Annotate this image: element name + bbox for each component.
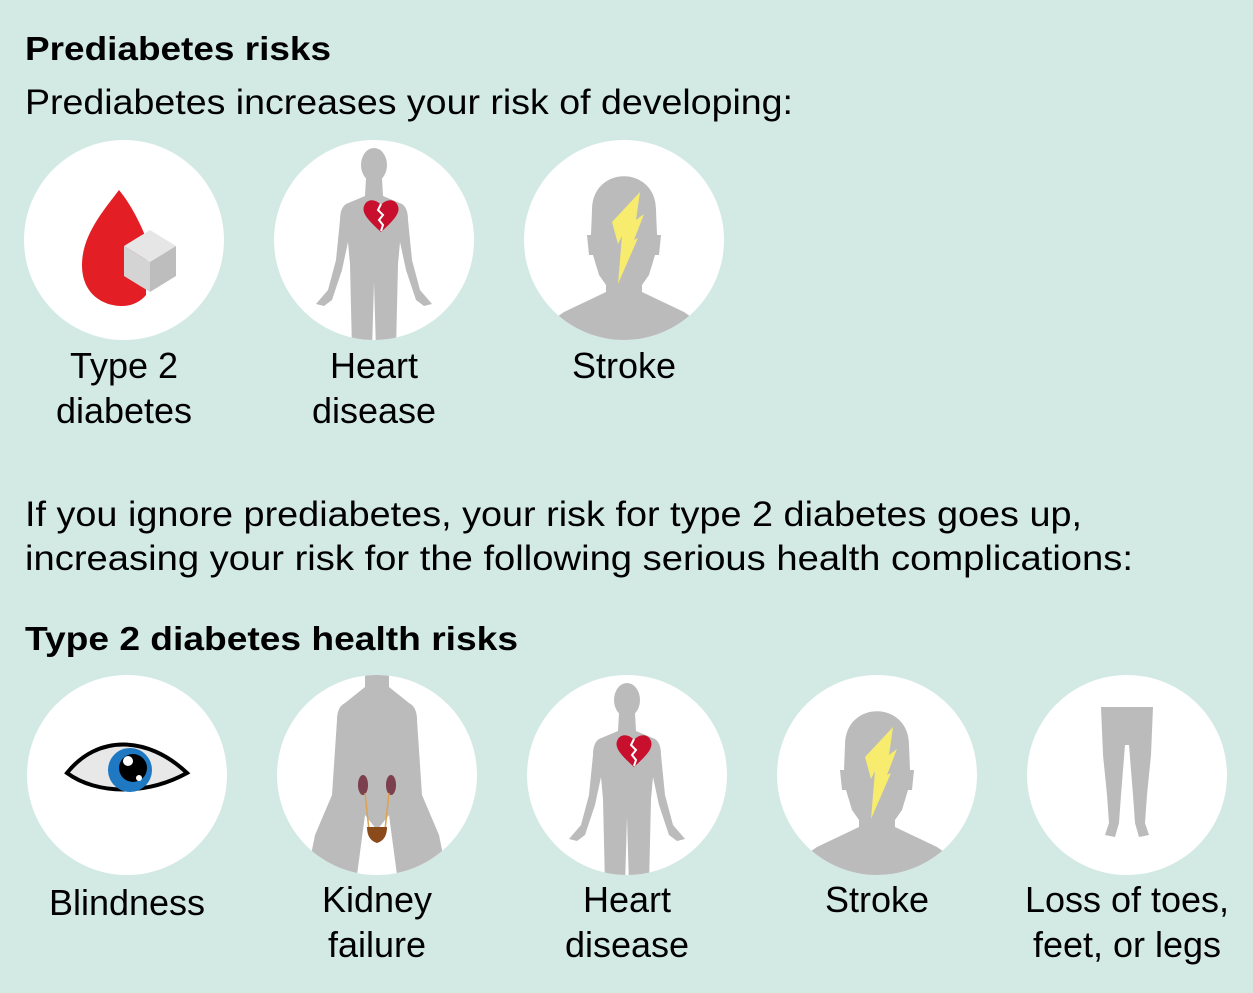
label: Type 2 diabetes: Type 2 [70,345,178,386]
icon: legs [1027,675,1227,875]
label: Type 2 diabetes: diabetes [56,390,192,431]
icon: stroke [777,675,977,875]
icon: type 2 diabetes (blood drop and sugar cube) [24,140,224,340]
label: Loss of toes, feet, or legs: Loss of toes, [1025,879,1229,920]
text: warning paragraph: increasing your risk for the following serious health complications: [25,539,1133,578]
title: Prediabetes risks: Prediabetes risks [25,30,331,67]
label: Heart disease: Heart [330,345,418,386]
icon: eye (blindness) [27,675,227,875]
label: Heart disease: disease [565,924,689,965]
icon: heart disease [274,140,474,350]
label: Stroke: Stroke [825,879,929,920]
label: Kidney failure: failure [328,924,426,965]
label: Heart disease: disease [312,390,436,431]
label: Loss of toes, feet, or legs: feet, or legs [1033,924,1221,965]
label: Stroke: Stroke [572,345,676,386]
label: Kidney failure: Kidney [322,879,432,920]
heading: Type 2 diabetes health risks: Type 2 diabetes health risks [25,620,518,657]
icon: heart disease [527,675,727,885]
subtitle: Prediabetes increases your risk of developing: [25,83,793,122]
icon: stroke [524,140,724,340]
label: Heart disease: Heart [583,879,671,920]
icon: kidney failure [277,665,477,875]
label: Blindness: Blindness [49,882,205,923]
text: warning paragraph: If you ignore prediabetes, your risk for type 2 diabetes goes up, [25,495,1082,534]
